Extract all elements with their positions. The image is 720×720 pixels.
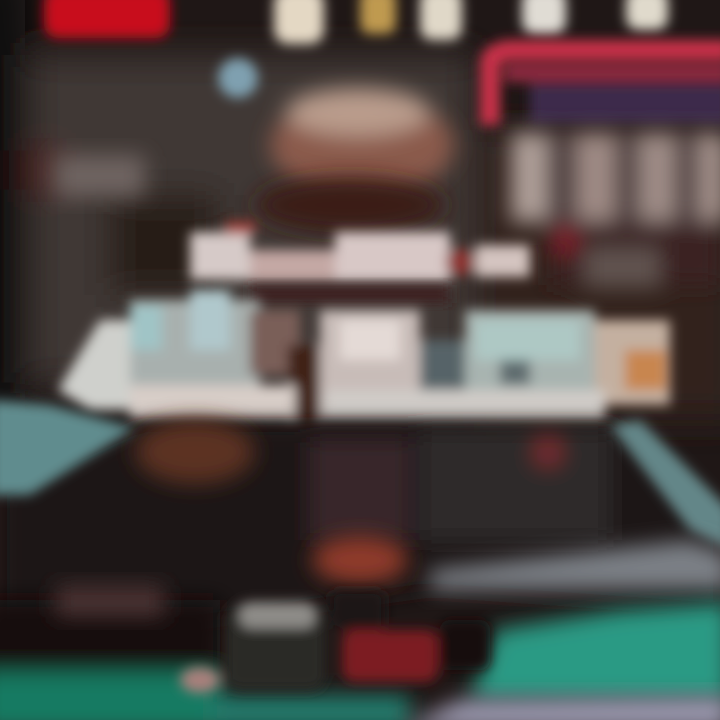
wall sign left <box>55 155 145 197</box>
left teal sleeve <box>0 400 135 495</box>
right teal sleeve <box>610 420 720 550</box>
blue light orb <box>218 58 258 98</box>
ceiling lights <box>274 0 668 44</box>
left reflection <box>55 585 165 617</box>
dark torso <box>127 407 616 544</box>
shelf of bottles <box>510 130 720 288</box>
table edge highlight <box>400 696 720 720</box>
pink neon sign on the right <box>490 50 720 125</box>
shirt band <box>58 290 670 425</box>
red chip on wrist <box>312 536 408 584</box>
hair <box>270 88 454 197</box>
hand <box>135 420 255 484</box>
shadow under visor <box>250 285 450 303</box>
green poker table <box>0 600 720 720</box>
face shadow <box>255 177 445 233</box>
stack of chips <box>180 590 490 693</box>
background wall <box>0 0 720 420</box>
red neon sign <box>44 0 170 38</box>
right forearm <box>430 540 720 590</box>
visor band <box>190 222 530 282</box>
